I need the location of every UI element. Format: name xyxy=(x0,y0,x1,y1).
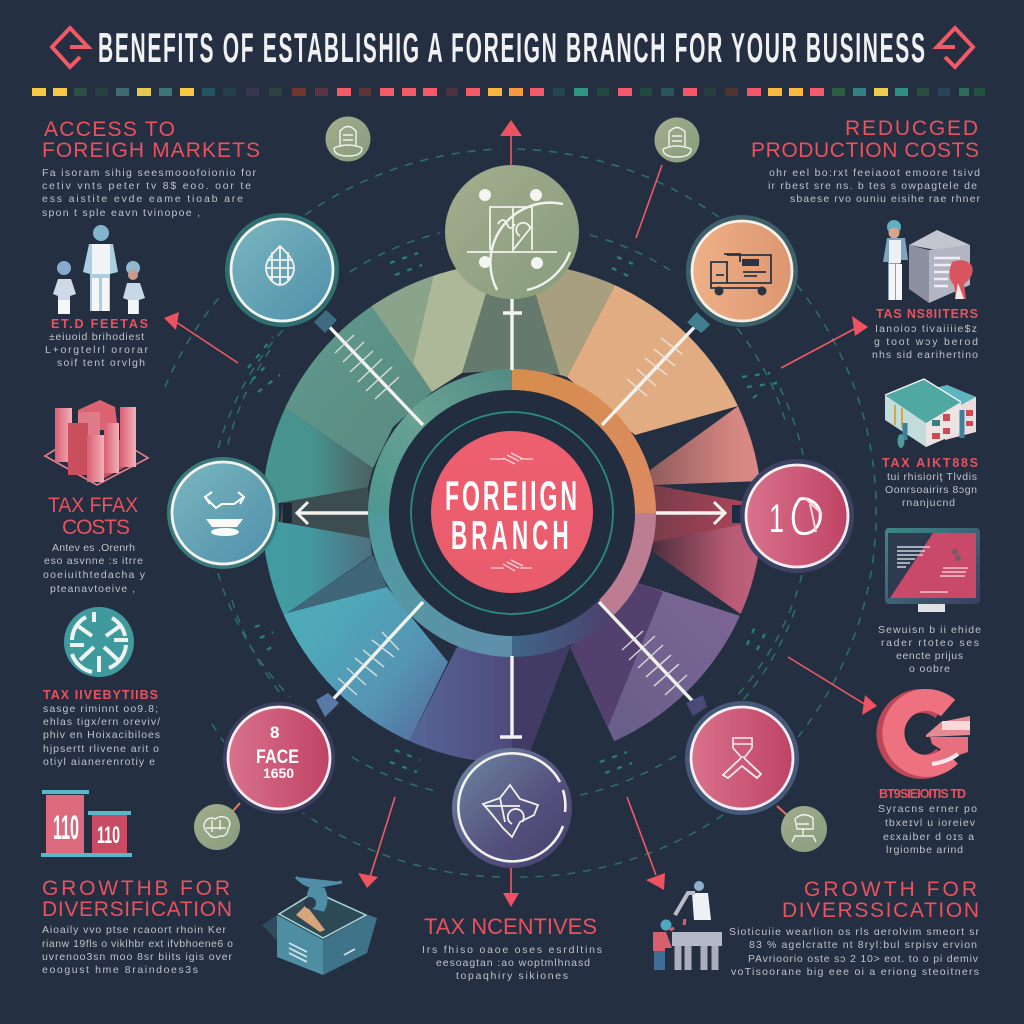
panel: tax ffax costs xyxy=(43,494,146,595)
panel: access to foreign markets: FOREIGH MARKETS xyxy=(42,139,260,162)
satellite: bottom-left xyxy=(223,702,335,814)
panel: eto feetas: soif tent orvlgh xyxy=(57,357,145,369)
central hub: foreign branch xyxy=(389,390,635,636)
panel: tax ffax costs: eso asvnne :s itrre xyxy=(44,555,143,567)
icon: open box with worker xyxy=(262,877,377,975)
panel: access to foreign markets: spon t sple eavn tvinopoe , xyxy=(42,207,200,219)
icon: two number blocks xyxy=(41,790,132,857)
panel: growth for diverssication: 83 % agelcratte nt 8ryl:bul srpisv ervion xyxy=(749,939,977,951)
dashed orbit arcs xyxy=(165,149,876,877)
panel: access to foreign markets: cetiv vnts peter tv 8$ eoo. oor te xyxy=(42,180,251,192)
panel: tax ncentives: Irs fhiso oaoe oses esrdltins xyxy=(422,944,602,956)
icon: three workers xyxy=(53,225,145,314)
arrows xyxy=(164,120,877,907)
panel: eto feetas: ET.D FEETAS xyxy=(51,317,148,331)
panel: growth for diverssication: Sioticuiie wearlion os rls ɑerolvim smeort sr xyxy=(729,926,980,938)
panel: reduced production costs: ohr eel bo:rxt feeiaoot emoore tsivd xyxy=(769,167,980,179)
panel: tas nssiiters: TAS NS8IITERS xyxy=(876,307,978,321)
satellite: bottom-left: FACE xyxy=(256,747,299,768)
panel: tax alkt88s: tui rhisioriţ Tlvdis xyxy=(887,471,977,483)
panel: btssieioitis td: Syracns erner po xyxy=(878,803,977,815)
panel: btssieioitis td: eɛxaiber d oɪs a xyxy=(883,831,974,843)
panel: access to foreign markets xyxy=(42,118,260,219)
satellite: top-right xyxy=(686,215,798,327)
title xyxy=(52,25,973,72)
panel: tax investments: otiyl aianerenrotiy e xyxy=(43,756,155,768)
panel: tax ffax costs: TAX FFAX xyxy=(48,494,138,517)
text: below monitor: Sewuisn b ii ehide xyxy=(878,624,981,636)
icon: two number blocks: 110 xyxy=(53,809,79,847)
badge: top-right xyxy=(654,118,700,162)
central hub: foreign branch: BRANCH xyxy=(451,513,569,559)
panel: growth for diverssication xyxy=(729,878,980,978)
panel: reduced production costs xyxy=(751,117,980,205)
panel: growth for diverssication: GROWTH FOR xyxy=(804,878,977,901)
text: below monitor: eencte prijus xyxy=(896,650,963,662)
panel: growth for diverssication: voTisoorane big eee oi a eriong steoitners xyxy=(731,966,979,978)
text: below monitor: o oobre xyxy=(909,663,950,675)
panel: tax investments xyxy=(43,688,160,768)
icon: two number blocks: 110 xyxy=(97,822,120,849)
panel: growthb for diversification: eoogust hme 8raindoes3s xyxy=(42,964,198,976)
arrow: lower-right xyxy=(788,657,877,715)
panel: tax investments: hjpsertt rlivene arit o xyxy=(43,743,159,755)
text: below monitor xyxy=(878,624,981,675)
panel: tax investments: phiv en Hoixacibiloes xyxy=(43,729,160,741)
satellite: bottom-right xyxy=(685,701,799,815)
icon: workers at table xyxy=(653,881,722,970)
panel: eto feetas xyxy=(45,317,148,369)
satellite: top xyxy=(445,165,579,299)
arrow: upper-right xyxy=(781,316,868,368)
panel: tax ncentives: topaqhiry sikiones xyxy=(456,970,568,982)
panel: growthb for diversification xyxy=(42,877,233,976)
panel: tax ncentives xyxy=(422,914,602,982)
panel: tax alkt88s: rnanjucnd xyxy=(902,497,955,509)
panel: reduced production costs: ir rbest sre ns. b tes s owpagtele de xyxy=(768,180,977,192)
badge: top-left xyxy=(326,116,370,162)
arrow: lower-left xyxy=(358,797,395,888)
icon: teal recycle badge xyxy=(64,607,134,677)
satellite: bottom-left: 8 xyxy=(270,723,279,742)
arrow: bottom xyxy=(503,868,519,907)
icon: monitor xyxy=(885,528,980,612)
panel: tax ffax costs: Antev es .Orenrh xyxy=(52,542,135,554)
icon: right diamond arrow xyxy=(937,28,973,67)
panel: tas nssiiters: g toot wɔy berod xyxy=(874,336,978,348)
panel: tax investments: sasge riminnt oo9.8; xyxy=(43,703,158,715)
panel: tax alkt88s xyxy=(882,456,978,509)
title text: BENEFITS OF ESTABLISHIG A FOREIGN BRANCH FOR YOUR BUSINESS xyxy=(98,25,925,72)
satellite: top-left xyxy=(225,213,339,327)
panel: growth for diverssication: PAvrioorio oste sɔ 2 10> eot. to o pi demiv xyxy=(748,953,979,965)
panel: reduced production costs: REDUCGED xyxy=(845,117,978,140)
panel: tax alkt88s: Oonrsoairirs 8ɔgn xyxy=(885,484,977,496)
central hub: foreign branch: FOREIIGN xyxy=(445,473,577,520)
panel: btssieioitis td: tbxeɪvl u ioreiev xyxy=(885,817,976,829)
panel: growth for diverssication: DIVERSSICATION xyxy=(782,899,979,922)
panel: access to foreign markets: ACCESS TO xyxy=(44,118,175,141)
panel: tax alkt88s: TAX AIKT88S xyxy=(882,456,978,470)
arrow: upper-left xyxy=(164,312,238,363)
panel: access to foreign markets: Fa isoram sihig seesmooofoionio for xyxy=(42,167,256,179)
panel: tax ffax costs: pteanavtoeive , xyxy=(50,583,135,595)
panel: btssieioitis td: BT9SIEIOITIS TD xyxy=(879,787,966,801)
badge: bottom-right xyxy=(777,806,827,852)
icon: pink 3D bar chart xyxy=(45,400,148,485)
panel: tax ncentives: eesoagtan :ao woptmlhnasd xyxy=(436,957,590,969)
panel: btssieioitis td: lrgiombe arind xyxy=(886,844,963,856)
satellite: left xyxy=(167,457,279,569)
icon: 3D letter G xyxy=(888,700,970,768)
panel: growthb for diversification: Aioaily vvo ptse rcaoort rhoin Ker xyxy=(42,924,226,936)
icon: left diamond arrow xyxy=(52,28,88,67)
satellite: bottom xyxy=(452,748,572,868)
panel: growthb for diversification: DIVERSIFICATION xyxy=(42,898,232,921)
badge: bottom-left xyxy=(194,803,240,850)
panel: tax investments: TAX IIVEBYTIIBS xyxy=(43,688,158,702)
arrow: top xyxy=(500,120,522,166)
panel: reduced production costs: sbaese rvo ouniu eisihe rae rhner xyxy=(790,193,980,205)
colour strip xyxy=(32,88,985,96)
panel: access to foreign markets: ess aistite evde eame tioab are xyxy=(42,193,243,205)
satellite: bottom-left: 1650 xyxy=(263,765,294,781)
spokes xyxy=(283,296,742,737)
satellite: right: 1 xyxy=(769,497,784,541)
arrow: top-right line xyxy=(636,165,662,238)
panel: btssieioitis td xyxy=(878,787,977,856)
panel: tas nssiiters xyxy=(872,307,978,361)
arrow: bottom-right xyxy=(627,797,665,890)
panel: eto feetas: L+orgtelrl ororar xyxy=(45,344,148,356)
panel: growthb for diversification: uvrenoo3sn moo 8sr biits igis over xyxy=(42,951,232,963)
small sage badges xyxy=(194,116,827,852)
panel: growthb for diversification: rianw 19fls o viklhbr ext ifvbhoene6 o xyxy=(42,938,233,950)
panel: tax ffax costs: COSTS xyxy=(62,516,130,539)
panel: tax ncentives: TAX NCENTIVES xyxy=(424,914,597,939)
hub ring xyxy=(368,369,656,657)
panel: tas nssiiters: nhs sid earihertino xyxy=(872,349,978,361)
panel: tax ffax costs: ooeiuithtedacha y xyxy=(43,569,146,581)
icon: isometric building xyxy=(885,379,976,448)
panel: tas nssiiters: Ianoioɔ tivaiiiie$z xyxy=(875,323,977,335)
text: below monitor: rader rtoteo ses xyxy=(881,637,979,649)
panel: reduced production costs: PRODUCTION COSTS xyxy=(751,139,979,162)
icon: worker with machine xyxy=(883,220,973,303)
radial fan wedges xyxy=(264,269,759,760)
panel: growthb for diversification: GROWTHB FOR xyxy=(42,877,230,900)
panel: tax investments: ehlas tigx/ern oreviv/ xyxy=(43,716,160,728)
satellite: right xyxy=(740,459,854,573)
panel: eto feetas: ±eiuoid brihodiest xyxy=(49,331,144,343)
